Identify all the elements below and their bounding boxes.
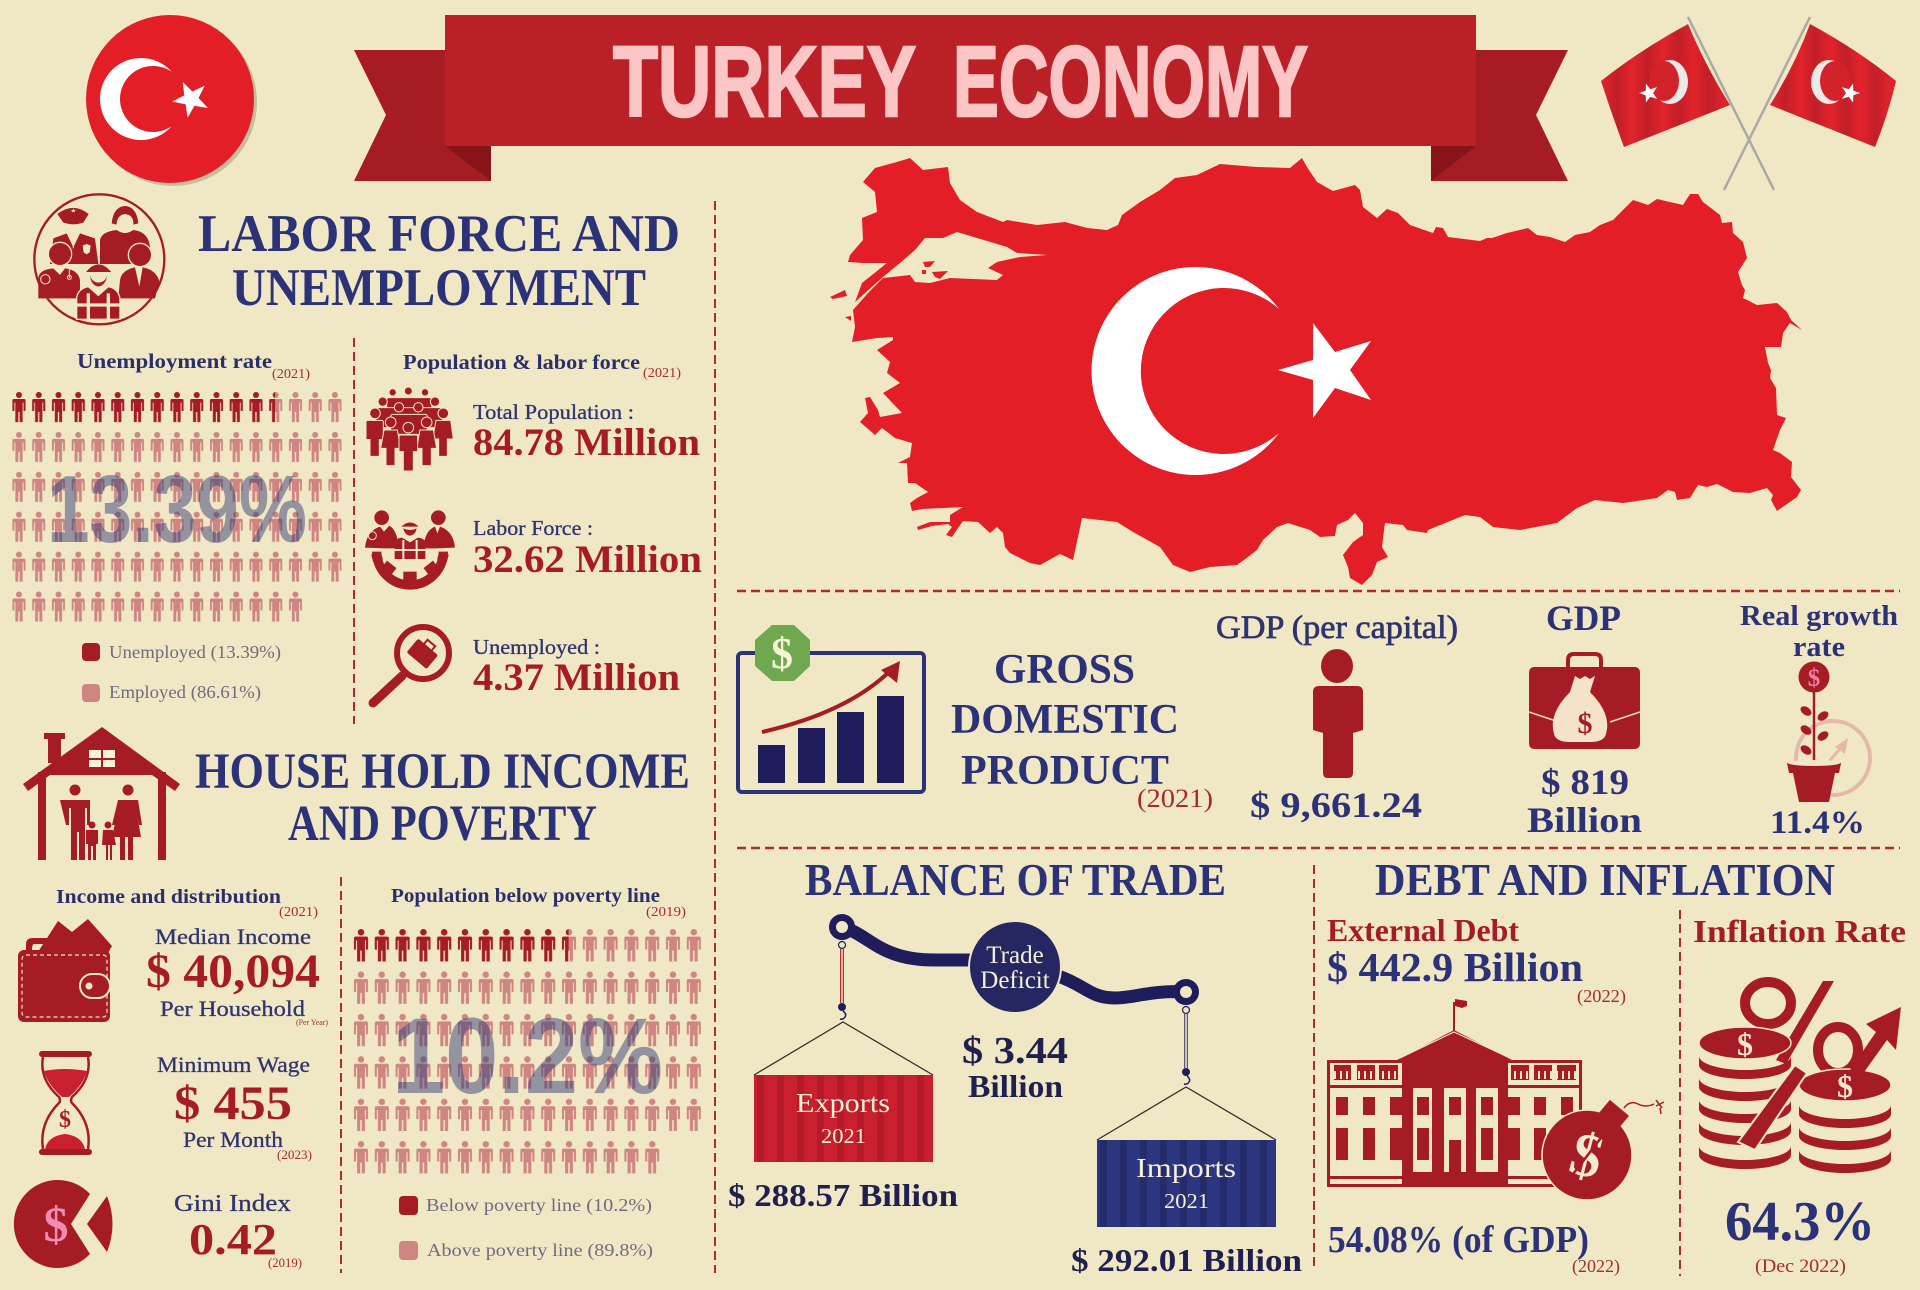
heading	[195, 744, 690, 852]
pictogram chart: poverty 10.2%	[351, 929, 704, 1175]
stat: unemployed	[473, 635, 680, 699]
stat: GDP per capita: GDP (per capital)	[1216, 610, 1458, 646]
stat: median income: Median Income	[155, 924, 311, 949]
stat: gini index: 0.42	[189, 1215, 277, 1264]
crane beam with trade deficit	[832, 918, 1196, 1013]
stat: GDP total	[1527, 598, 1642, 840]
heading: DOMESTIC	[951, 697, 1179, 743]
pictogram chart: unemployment 13.39%	[9, 392, 345, 622]
stat: trade deficit value: Billion	[968, 1068, 1063, 1104]
heading: LABOR FORCE AND	[198, 205, 680, 263]
sub-heading: population and labor force: Population & labor force	[403, 350, 640, 374]
stat: labor force: 32.62 Million	[473, 538, 702, 581]
stat: minimum wage: (2023)	[277, 1147, 312, 1162]
stat: external debt	[1327, 912, 1626, 1007]
sub-heading: population below poverty line	[391, 885, 686, 920]
stat: gini index: Gini Index	[174, 1191, 291, 1217]
stat: real growth rate: Real growth	[1740, 601, 1898, 632]
stat: GDP total: GDP	[1546, 598, 1621, 638]
stat: GDP total: $	[1578, 707, 1592, 740]
sub-heading: income and distribution: Income and distribution	[56, 886, 281, 908]
title: TURKEY	[613, 26, 916, 138]
icon: crossed flags	[1601, 17, 1896, 190]
sub-heading: unemployment rate: (2021)	[272, 367, 310, 382]
pictogram chart: unemployment 13.39%: 13.39%	[47, 456, 307, 563]
legend: unemployment: Employed (86.61%)	[109, 682, 261, 703]
map of Turkey with flag	[830, 158, 1802, 585]
stat: minimum wage	[157, 1052, 312, 1162]
sub-heading: income and distribution: (2021)	[279, 905, 318, 920]
sub-heading: population and labor force: (2021)	[643, 366, 681, 381]
stat: unemployed: Unemployed :	[473, 635, 600, 659]
legend: poverty: Above poverty line (89.8%)	[427, 1240, 653, 1261]
stat: trade deficit value	[962, 1030, 1068, 1104]
panel: debt and inflation	[1327, 854, 1906, 1277]
exports container	[754, 942, 933, 1162]
icon: hourglass: $	[59, 1107, 71, 1133]
heading: PRODUCT	[961, 748, 1169, 794]
stat: labor force: Labor Force :	[473, 516, 593, 540]
crane beam with trade deficit: Trade	[986, 942, 1044, 969]
stat: external debt: (2022)	[1577, 986, 1626, 1007]
stat: imports value: $ 292.01 Billion	[1071, 1242, 1302, 1278]
sub-heading: unemployment rate	[77, 349, 310, 382]
icon: growth chart with dollar badge	[738, 625, 924, 792]
stat: minimum wage: $ 455	[174, 1077, 292, 1130]
stat: GDP total: Billion	[1527, 800, 1642, 840]
icon: house with family	[23, 727, 180, 860]
stat: minimum wage: Minimum Wage	[157, 1052, 310, 1077]
icon: wallet	[18, 919, 112, 1022]
icon: gini pie: $	[44, 1196, 68, 1252]
icon: population crowd	[366, 387, 453, 471]
imports container	[1097, 1006, 1276, 1227]
icon: inflation coins and percent: $	[1737, 1026, 1753, 1062]
stat: median income: Per Household	[160, 996, 305, 1021]
pictogram chart: poverty 10.2%: 10.2%	[392, 995, 663, 1116]
heading: BALANCE OF TRADE	[805, 854, 1226, 905]
stat: minimum wage: Per Month	[183, 1127, 283, 1152]
stat: GDP per capita: $ 9,661.24	[1250, 785, 1422, 825]
stat: GDP total: $ 819	[1541, 762, 1629, 802]
sub-heading: income and distribution	[56, 886, 318, 920]
icon: magnifier over briefcase	[373, 627, 449, 703]
stat: debt to GDP	[1328, 1219, 1620, 1277]
stat: inflation value: (Dec 2022)	[1755, 1256, 1846, 1277]
icon: inflation coins and percent: $	[1837, 1068, 1853, 1104]
title ribbon	[354, 15, 1568, 181]
icon: inflation coins and percent	[1699, 981, 1901, 1173]
panel: gross domestic product	[738, 598, 1898, 841]
icon: growth chart with dollar badge: $	[771, 629, 793, 678]
icon: round Turkish flag	[86, 15, 257, 186]
dividers	[341, 201, 1900, 1276]
stat: real growth rate: rate	[1793, 632, 1845, 663]
heading: AND POVERTY	[288, 796, 597, 852]
legend: unemployment	[82, 642, 281, 703]
stat: gini index: (2019)	[268, 1255, 302, 1270]
stat: real growth rate: $	[1808, 665, 1820, 692]
icon: hourglass	[39, 1051, 92, 1155]
sub-heading: population below poverty line: Population below poverty line	[391, 885, 660, 907]
stat: external debt: $ 442.9 Billion	[1327, 944, 1583, 990]
stat: real growth rate	[1740, 601, 1898, 841]
stat: median income	[146, 924, 328, 1027]
icon: gini pie	[14, 1180, 113, 1268]
stat: median income: (Per Year)	[296, 1018, 328, 1027]
icon: workers in circle	[34, 194, 164, 324]
panel: balance of trade	[728, 854, 1302, 1278]
heading: GROSS	[994, 647, 1135, 693]
heading: DEBT AND INFLATION	[1375, 854, 1835, 905]
title: ECONOMY	[953, 26, 1308, 138]
heading: UNEMPLOYMENT	[232, 259, 646, 317]
stat: labor force	[473, 516, 702, 581]
stat: debt to GDP: 54.08% (of GDP)	[1328, 1219, 1589, 1261]
panel: labor force and unemployment	[9, 194, 702, 703]
sub-heading: population below poverty line: (2019)	[646, 905, 686, 920]
heading: HOUSE HOLD INCOME	[195, 744, 690, 800]
panel: household income and poverty	[14, 727, 704, 1270]
stat: gini index	[174, 1191, 302, 1270]
heading: (2021)	[1137, 784, 1213, 813]
icon: government building with bomb: $	[1563, 1119, 1611, 1193]
stat: unemployed: 4.37 Million	[473, 656, 680, 699]
stat heading: inflation rate: Inflation Rate	[1693, 913, 1906, 949]
stat: inflation value: 64.3%	[1725, 1191, 1875, 1253]
legend: poverty: Below poverty line (10.2%)	[426, 1195, 652, 1216]
imports container: Imports	[1136, 1153, 1236, 1183]
icon: government building with bomb	[1327, 999, 1664, 1200]
icon: labor force gear	[365, 510, 455, 585]
stat: trade deficit value: $ 3.44	[962, 1030, 1068, 1072]
imports container: 2021	[1164, 1189, 1209, 1213]
title	[613, 26, 1308, 138]
stat: median income: $ 40,094	[146, 945, 320, 998]
stat: total population	[473, 400, 700, 464]
stat: debt to GDP: (2022)	[1572, 1256, 1620, 1277]
stat: exports value: $ 288.57 Billion	[728, 1177, 958, 1213]
sub-heading: unemployment rate: Unemployment rate	[77, 349, 272, 373]
exports container: Exports	[796, 1088, 890, 1118]
legend: unemployment: Unemployed (13.39%)	[109, 642, 281, 663]
stat: total population: 84.78 Million	[473, 421, 700, 464]
sub-heading: population and labor force	[403, 350, 681, 381]
exports container: 2021	[821, 1124, 866, 1148]
heading	[951, 647, 1213, 813]
legend: poverty	[399, 1195, 653, 1261]
stat: real growth rate: 11.4%	[1770, 805, 1865, 841]
crane beam with trade deficit: Deficit	[980, 967, 1050, 994]
stat: GDP per capita	[1216, 610, 1458, 825]
stat: total population: Total Population :	[473, 400, 634, 424]
stat: external debt: External Debt	[1327, 912, 1519, 948]
heading	[198, 205, 680, 317]
